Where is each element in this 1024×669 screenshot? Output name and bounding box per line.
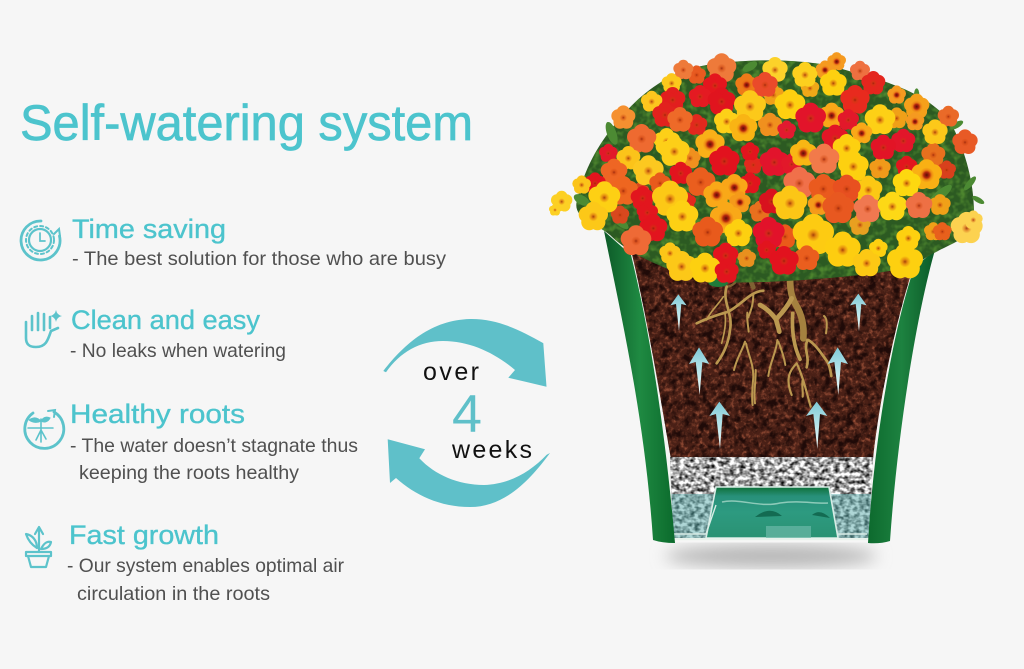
heading: Healthy roots: [70, 399, 245, 429]
description: - The water doesn’t stagnate thus: [70, 435, 358, 457]
gravel layer: [670, 457, 873, 538]
white inner lining: [628, 252, 916, 541]
description: circulation in the roots: [77, 583, 270, 605]
arrow: bottom curved arrow: [388, 439, 550, 507]
text: 4: 4: [452, 385, 482, 444]
arrow: water upper right: [850, 294, 867, 331]
pot wall left: [604, 231, 675, 543]
description: keeping the roots healthy: [79, 462, 299, 484]
water arrows rising through the soil: [670, 294, 867, 449]
roots: [697, 263, 831, 407]
description: [67, 555, 344, 605]
cycle graphic: over 4 weeks: [383, 319, 550, 507]
benefit: healthy roots: [25, 399, 358, 484]
description: - The best solution for those who are busy: [72, 248, 446, 270]
pot base line: [672, 538, 870, 540]
infographic canvas: [20, 52, 984, 600]
filler flowers under the main layer: [611, 65, 951, 267]
soil layer: [632, 254, 910, 458]
text: over: over: [423, 358, 479, 386]
benefit: fast growth: [26, 520, 344, 605]
arrow: water lower left: [709, 402, 730, 449]
icon: clock with circular arrow: [21, 221, 60, 260]
planter cross-section illustration: [549, 52, 985, 567]
icon: seedling with roots in circular arrow: [25, 410, 64, 448]
title: Self-watering system: [20, 95, 473, 151]
icon: clean hand with sparkle: [26, 310, 62, 347]
heading: Fast growth: [69, 520, 219, 550]
water reservoir: [673, 487, 867, 538]
arrow: water upper left: [670, 294, 687, 331]
text: weeks: weeks: [451, 436, 532, 464]
flower bouquet: [549, 52, 985, 287]
benefit: clean and easy: [26, 305, 286, 362]
pot shadow: [665, 545, 877, 567]
benefit: time saving: [21, 214, 446, 270]
icon: potted plant with up arrow: [26, 527, 51, 567]
flowers: [549, 52, 983, 283]
arrow: water middle right: [828, 347, 848, 395]
description: - Our system enables optimal air: [67, 555, 344, 577]
arrow: water lower right: [806, 402, 827, 449]
arrow: water middle left: [689, 347, 709, 395]
foliage mass: [572, 59, 985, 287]
pot wall right: [868, 250, 935, 543]
heading: Time saving: [72, 214, 226, 244]
water level tint: [671, 494, 872, 538]
description: - No leaks when watering: [70, 340, 286, 362]
arrow: top curved arrow: [383, 319, 546, 387]
description: [70, 435, 358, 484]
heading: Clean and easy: [71, 305, 260, 335]
